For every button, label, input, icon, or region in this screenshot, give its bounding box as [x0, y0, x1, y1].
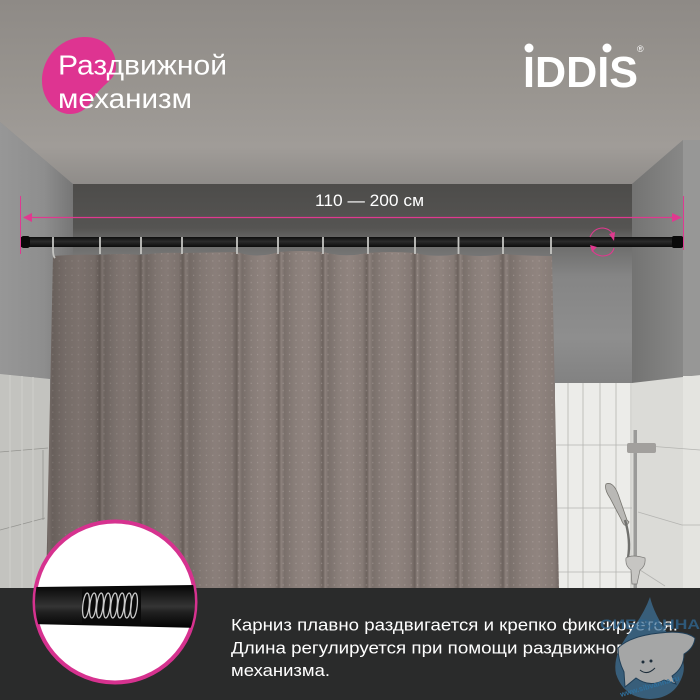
- curtain rod: [21, 236, 683, 248]
- left wall: [0, 122, 73, 400]
- logo: IDDIS: ®: [637, 44, 644, 54]
- description text: [231, 616, 678, 680]
- watermark: bath in water drop: www.sibvanna.ru: [618, 673, 681, 699]
- dimension label: 110 — 200 см: [315, 192, 424, 210]
- watermark: bath in water drop: СИБВАННА: [600, 616, 700, 632]
- right wall: [632, 140, 700, 400]
- logo: IDDIS: IDDIS: [523, 48, 638, 97]
- rotation icon: [590, 228, 615, 256]
- spring coil: [82, 593, 138, 618]
- description text: Карниз плавно раздвигается и крепко фиксируется.: [231, 616, 678, 634]
- dimension line with arrows: [20, 196, 684, 254]
- curtain: [46, 250, 560, 590]
- left tiles: [0, 374, 50, 590]
- title: [58, 50, 227, 114]
- title: механизм: [58, 83, 192, 114]
- bottom panel: [0, 588, 700, 700]
- description text: механизма.: [231, 661, 330, 680]
- back wall: [73, 184, 632, 404]
- title: Раздвижной: [58, 50, 227, 80]
- watermark: bath in water drop: [600, 597, 700, 699]
- pink blob behind title: [42, 37, 116, 114]
- right tiles: [555, 375, 700, 589]
- ceiling: [0, 0, 700, 184]
- curtain rings: [53, 237, 551, 258]
- description text: Длина регулируется при помощи раздвижного: [231, 638, 633, 658]
- zoom circle: sliding mechanism: [30, 522, 200, 682]
- shower set: [606, 430, 656, 589]
